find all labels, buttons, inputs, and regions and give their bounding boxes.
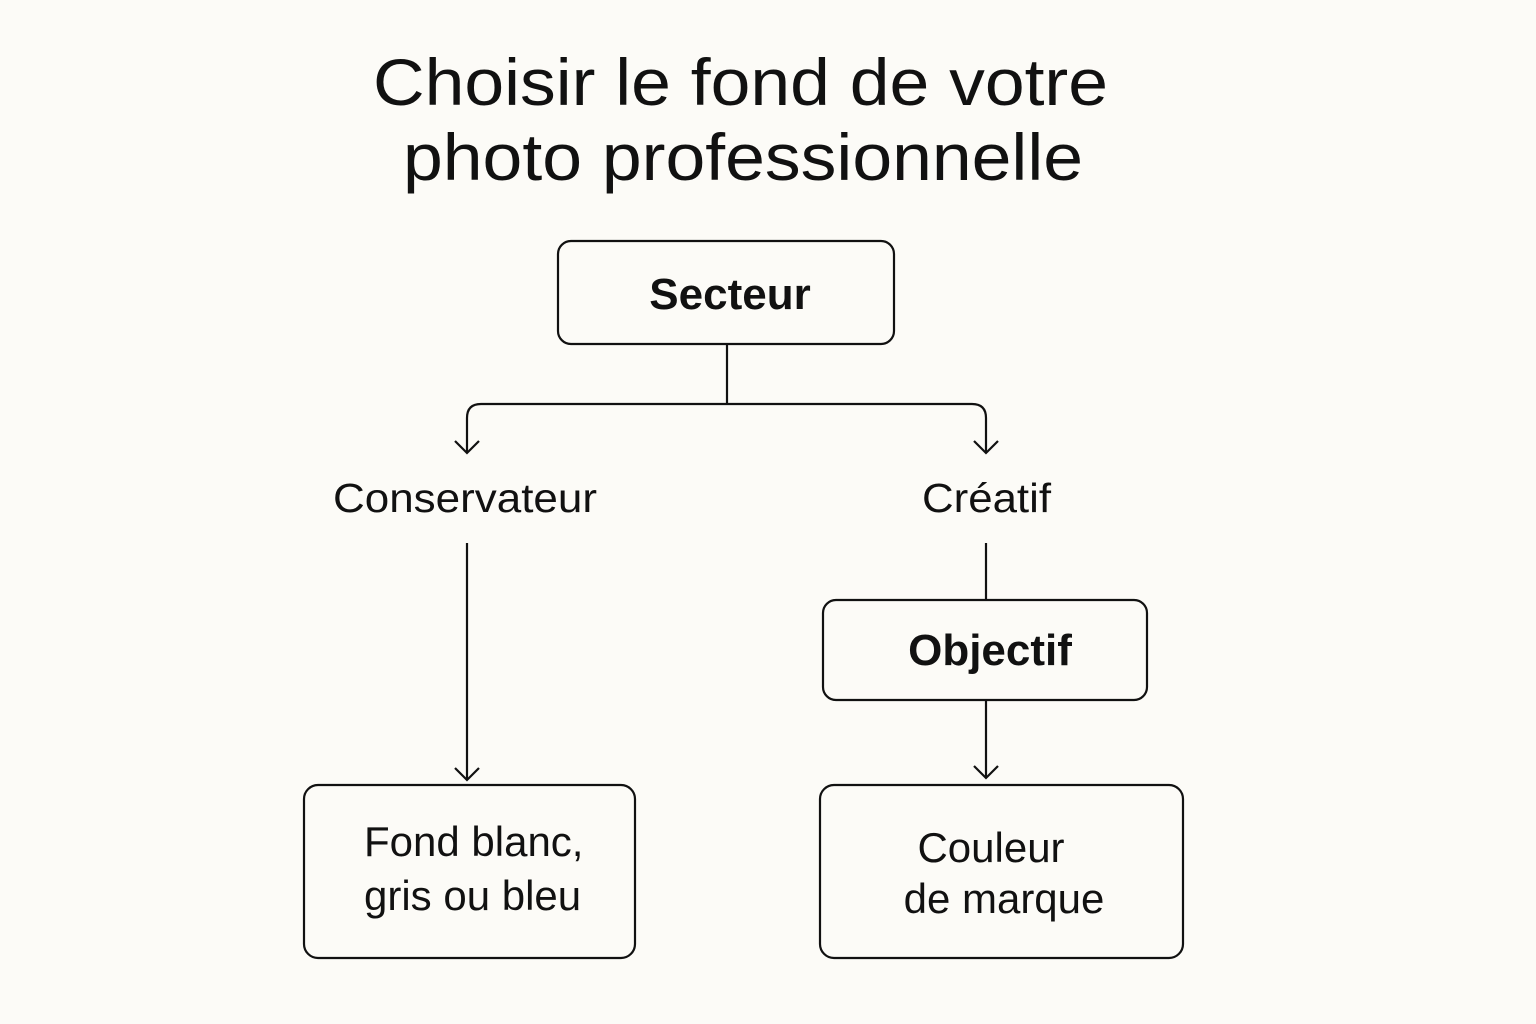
box: Couleur de marque — [820, 785, 1183, 958]
box: Fond blanc, gris ou bleu: gris ou bleu — [364, 872, 581, 919]
title — [373, 45, 1108, 194]
box: Couleur de marque: de marque — [904, 875, 1104, 922]
line: Créatif to Objectif — [985, 543, 987, 600]
box: Secteur: Secteur — [649, 270, 811, 319]
box: Secteur — [558, 241, 894, 344]
label: Conservateur: Conservateur — [333, 475, 597, 521]
label: Créatif: Créatif — [922, 475, 1052, 521]
box: Objectif — [823, 600, 1147, 700]
arrow: branch split — [455, 344, 998, 453]
arrow: Objectif to result — [974, 700, 998, 778]
arrow: Conservateur to result — [455, 543, 479, 780]
title: Choisir le fond de votre — [373, 45, 1108, 119]
box: Couleur de marque: Couleur — [917, 824, 1065, 871]
title: photo professionnelle — [403, 120, 1083, 194]
box: Objectif: Objectif — [908, 626, 1072, 675]
box: Fond blanc, gris ou bleu: Fond blanc, — [364, 818, 583, 865]
box: Fond blanc, gris ou bleu — [304, 785, 635, 958]
